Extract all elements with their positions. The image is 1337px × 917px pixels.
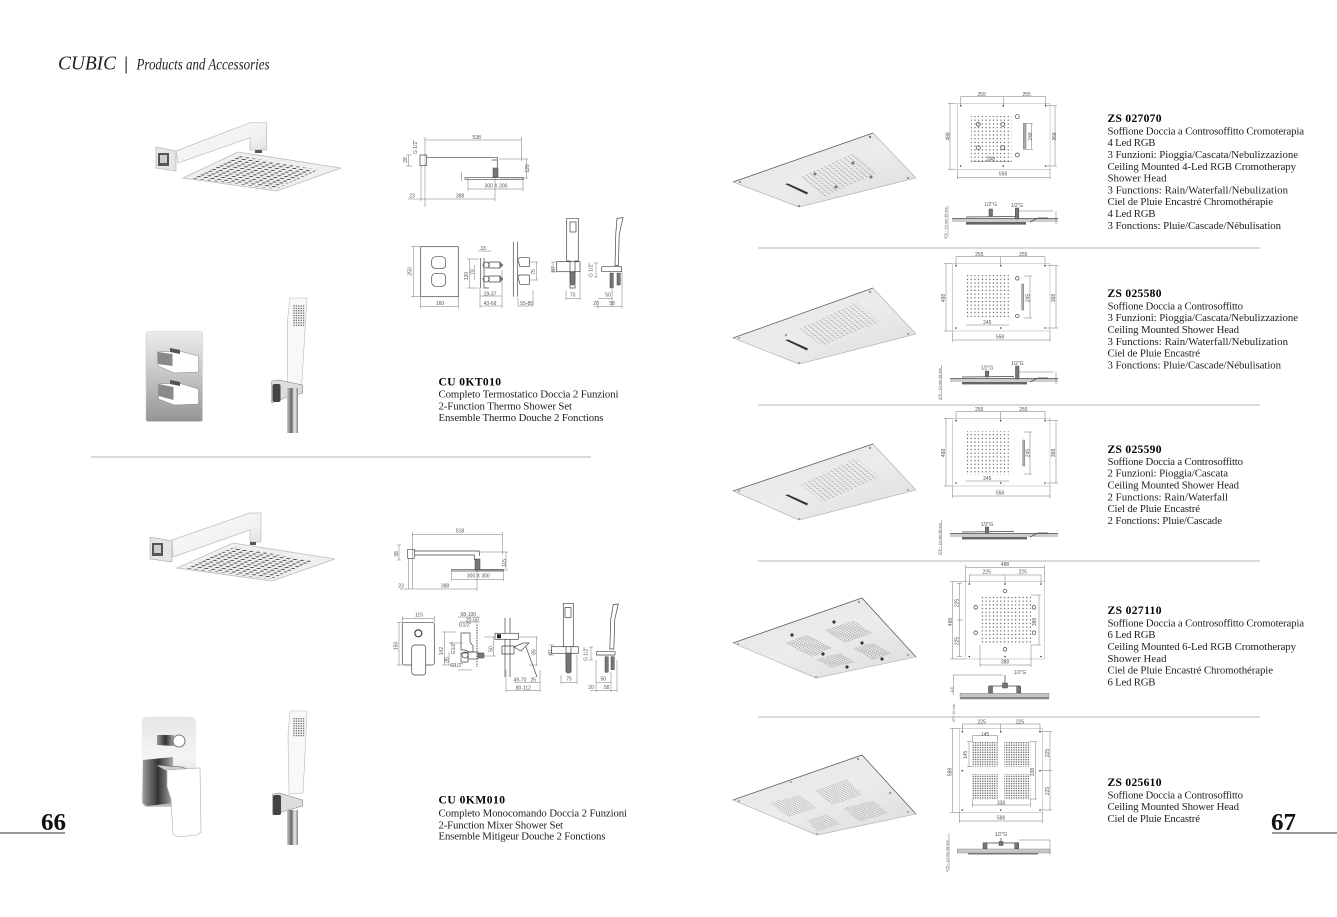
page number 66: 66 (41, 810, 66, 836)
drawing: 4-LED panel side view (944, 202, 1058, 239)
drawing: mixer valve section: 80-112 (516, 685, 531, 691)
drawing: 6-LED panel plan: 225 (983, 570, 991, 576)
text block: ZS 027110: Shower Head (1108, 653, 1167, 665)
text block: ZS 025610: Ceiling Mounted Shower Head (1108, 801, 1240, 813)
drawing: mixer valve section: 25 (531, 678, 536, 684)
drawing: four-zone panel plan: 338 (997, 800, 1005, 806)
photo: hand shower and bracket (273, 711, 307, 845)
drawing: four-zone panel plan: 588 (997, 816, 1005, 822)
photo: 3-function ceiling shower panel (733, 288, 916, 364)
panel: CU 0KT010 thermo shower set (146, 123, 341, 433)
text block: ZS 025580: 3 Functions: Rain/Waterfall/Nebulization (1108, 336, 1289, 348)
page heading: Products and Accessories (136, 56, 270, 74)
page number 67: 67 (1271, 810, 1296, 836)
drawing: 4-LED panel side view: 1/2"G (984, 202, 997, 208)
text block: ZS 027070: Soffione Doccia a Controsoffitto Cromoterapia (1108, 125, 1304, 137)
drawing: hand shower front and side: 70 (570, 293, 576, 299)
drawing: four-zone panel plan: 145 (981, 732, 989, 738)
drawing: shower arm elevation: 23 (398, 583, 404, 589)
drawing: 6-LED panel side view: 115 (950, 687, 954, 693)
drawing: hand shower front and side (551, 218, 623, 309)
drawing: 3-function panel plan: 368 (1051, 294, 1057, 302)
drawing: shower arm elevation: 518 (456, 528, 464, 534)
text block: ZS 025590: Ciel de Pluie Encastré (1108, 503, 1200, 515)
drawing: 4-LED panel plan: 558 (999, 172, 1007, 178)
drawing: hand shower front and side: 87 (548, 649, 554, 655)
text block: ZS 025590 (1108, 444, 1243, 527)
drawing: 2-function panel side view (938, 520, 1058, 555)
drawing: mixer valve section: 142 (439, 647, 445, 655)
drawing: hand shower front and side: 20 (593, 301, 599, 307)
text block: ZS 025610: ZS 025610 (1108, 777, 1162, 789)
drawing: 2-function panel side view: 475 ~ 10 mm 48 mm (938, 523, 942, 555)
text block: CU 0KT010 (438, 376, 618, 424)
diagram: CU 0KM010 technical drawings (394, 528, 618, 692)
text block: ZS 025590: 2 Fonctions: Pluie/Cascade (1108, 515, 1222, 527)
text block: ZS 027110: Ciel de Pluie Encastré Chromothérapie (1108, 665, 1273, 677)
drawing: shower arm elevation: 388 (456, 194, 464, 200)
text block: ZS 025590: 2 Functions: Rain/Waterfall (1108, 491, 1228, 503)
page number 67 (1271, 810, 1337, 836)
page heading (58, 52, 270, 74)
drawing: shower arm elevation (403, 135, 531, 207)
drawing: shower arm elevation: 28 (403, 157, 409, 163)
photo: rain shower head with wall arm (156, 123, 341, 191)
drawing: shower arm elevation: 300 X 300 (467, 573, 490, 579)
drawing: 3-function panel plan: 488 (941, 294, 947, 302)
text block: ZS 025580: 3 Funzioni: Pioggia/Cascata/Nebulizzazione (1108, 312, 1298, 324)
drawing: mixer plate front: 115 (415, 613, 423, 619)
drawing: 2-function panel plan: 368 (1051, 449, 1057, 457)
photo: rain shower head with wall arm (150, 513, 335, 581)
drawing: 3-function panel side view: 1/2"G (981, 365, 993, 371)
photo: thermostatic valve plate (146, 332, 202, 422)
drawing: hand shower front and side: 50 (605, 293, 611, 299)
text block: ZS 025590: Ceiling Mounted Shower Head (1108, 480, 1240, 492)
text block: CU 0KT010: 2-Function Thermo Shower Set (438, 400, 572, 412)
drawing: shower arm elevation: 120 (525, 164, 531, 173)
text block: ZS 025610: Ciel de Pluie Encastré (1108, 813, 1200, 825)
drawing: mixer valve section: 68-100 (461, 612, 476, 618)
drawing: 3-function panel plan: 245 (983, 320, 992, 326)
drawing: 4-LED panel plan (946, 92, 1058, 179)
text block: ZS 027110: 6 Led RGB (1108, 629, 1156, 641)
text block: ZS 025580: Ceiling Mounted Shower Head (1108, 324, 1240, 336)
drawing: thermostatic plate front (408, 247, 458, 309)
drawing: thermostatic valve section: 33 (480, 246, 486, 252)
drawing: four-zone panel plan: 225 (1045, 749, 1051, 757)
text block: ZS 025580: 3 Fonctions: Pluie/Cascade/Nébulisation (1108, 359, 1282, 371)
drawing: 6-LED panel side view: 475~10 mm (952, 704, 956, 722)
drawing: 3-function panel plan: 255 (975, 252, 984, 258)
text block: ZS 027110: Soffione Doccia a Controsoffitto Cromoterapia (1108, 617, 1304, 629)
drawing: 2-function panel plan: 558 (996, 490, 1004, 496)
drawing: hand shower front and side: 20 (588, 685, 594, 691)
text block: ZS 027070: 4 Led RGB (1108, 208, 1156, 220)
drawing: shower arm elevation: 300 X 300 (485, 184, 508, 190)
drawing: mixer valve section: G1/2" (450, 663, 463, 669)
panel: ZS 025580 (733, 252, 1298, 400)
drawing: mixer plate front: 150 (394, 642, 400, 650)
text block: ZS 027070: Ceiling Mounted 4-Led RGB Cromotherapy (1108, 161, 1297, 173)
drawing: four-zone panel plan: 225 (1016, 720, 1024, 726)
text block: ZS 025590: Soffione Doccia a Controsoffitto (1108, 456, 1243, 468)
drawing: thermostatic valve section: 120 (464, 272, 470, 280)
text block: CU 0KM010: CU 0KM010 (438, 794, 505, 806)
drawing: mixer valve section: 50 (488, 646, 494, 652)
drawing: 4-LED panel plan: 488 (946, 132, 952, 141)
drawing: 2-function panel side view: 1/2"G (981, 522, 993, 528)
drawing: 4-LED panel side view: 475 ~ 10 mm 48 mm (944, 207, 948, 239)
panel: CU 0KM010 mixer shower set (142, 513, 335, 845)
photo: 2-function ceiling shower panel (733, 444, 916, 520)
text block: ZS 027070: 3 Funzioni: Pioggia/Cascata/Nebulizzazione (1108, 149, 1298, 161)
photo: four-zone square ceiling panel (733, 755, 916, 835)
panel: ZS 025590 (733, 407, 1243, 555)
drawing: shower arm elevation: 388 (441, 583, 449, 589)
drawing: 3-function panel plan: 558 (996, 335, 1004, 341)
drawing: hand shower front and side: G 1/2" (584, 647, 590, 661)
drawing: 6-LED panel side view (950, 670, 1049, 722)
text block: ZS 027070: Ciel de Pluie Encastré Chromothérapie (1108, 196, 1273, 208)
text block: ZS 025580: ZS 025580 (1108, 288, 1162, 300)
text block: ZS 027110: Ceiling Mounted 6-Led RGB Cromotherapy (1108, 641, 1297, 653)
drawing: mixer plate front (394, 613, 434, 675)
drawing: thermostatic plate front: 160 (436, 301, 444, 307)
photo: mixer valve with lever (142, 717, 201, 837)
page number 66 (0, 810, 66, 836)
drawing: thermostatic valve section (464, 242, 538, 308)
panel: ZS 027110 (733, 562, 1304, 722)
text block: ZS 027110 (1108, 605, 1304, 688)
drawing: 4-LED panel side view: 1/2"G (1011, 203, 1023, 209)
text block: CU 0KM010 (438, 794, 627, 842)
photo: 6-LED square ceiling panel (733, 598, 916, 678)
drawing: hand shower front and side: G 1/2" (588, 263, 594, 277)
text block: ZS 027070: Shower Head (1108, 173, 1167, 185)
drawing: thermostatic valve section: 55-85 (520, 301, 533, 307)
drawing: 2-function panel plan (941, 407, 1058, 498)
drawing: hand shower front and side: 58 (609, 301, 615, 307)
text block: ZS 025610 (1108, 777, 1243, 825)
drawing: 2-function panel plan: 245 (983, 476, 992, 482)
drawing: four-zone panel side view: 475 ~ 10 mm 48 mm (946, 840, 950, 872)
drawing: hand shower front and side: 87 (551, 266, 557, 272)
drawing: thermostatic valve section: 43-69 (484, 301, 497, 307)
drawing: 6-LED panel plan: 488 (948, 618, 954, 626)
drawing: four-zone panel plan: 225 (978, 720, 986, 726)
text block: CU 0KT010: Ensemble Thermo Douche 2 Fonctions (438, 412, 604, 424)
diagram: CU 0KT010 technical drawings (403, 135, 623, 309)
drawing: shower arm elevation: 538 (473, 135, 481, 141)
drawing: four-zone panel plan: 338 (1030, 768, 1036, 776)
drawing: 3-function panel plan: 245 (1026, 294, 1032, 302)
drawing: mixer valve section: 49-70 (514, 678, 527, 684)
drawing: 3-function panel side view: 1/2"G (1011, 361, 1024, 367)
photo: 4-LED ceiling shower panel (733, 133, 916, 207)
drawing: four-zone panel plan: 145 (963, 751, 969, 759)
drawing: 4-LED panel plan: 248 (987, 156, 995, 162)
drawing: 4-LED panel plan: 248 (1028, 132, 1034, 141)
drawing: mixer valve section: 35 (444, 657, 450, 663)
text block: CU 0KM010: Completo Monocomando Doccia 2 Funzioni (438, 807, 627, 819)
drawing: hand shower front and side: 58 (604, 685, 610, 691)
page heading: CUBIC (58, 52, 117, 74)
drawing: thermostatic plate front: 250 (408, 267, 414, 276)
drawing: 6-LED panel plan: 225 (1019, 570, 1027, 576)
text block: ZS 027070 (1108, 113, 1304, 232)
drawing: mixer valve section: 20-50 (466, 618, 479, 624)
drawing: thermostatic valve section: 19-37 (484, 292, 497, 298)
drawing: thermostatic valve section: 70 (470, 269, 476, 275)
drawing: 4-LED panel plan: 255 (1023, 92, 1031, 98)
drawing: mixer valve section (439, 612, 540, 692)
drawing: hand shower front and side: 50 (601, 677, 606, 683)
photo: hand shower and bracket (272, 298, 307, 433)
drawing: shower arm elevation (394, 528, 508, 591)
drawing: 6-LED panel plan: 388 (1001, 660, 1009, 666)
drawing: 3-function panel plan (941, 252, 1058, 342)
drawing: shower arm elevation: 38 (394, 551, 400, 557)
drawing: mixer valve section: G1/2" (451, 641, 457, 654)
drawing: 6-LED panel side view: 1/2"G (1014, 670, 1026, 676)
drawing: 4-LED panel plan: 368 (1052, 132, 1058, 141)
drawing: shower arm elevation: 23 (409, 194, 415, 200)
drawing: hand shower front and side (548, 603, 618, 692)
drawing: 6-LED panel plan (948, 562, 1044, 667)
text block: ZS 027110: ZS 027110 (1108, 605, 1162, 617)
drawing: mixer valve section: 85 (532, 649, 538, 655)
text block: CU 0KM010: 2-Function Mixer Shower Set (438, 819, 563, 831)
drawing: shower arm elevation: 115 (502, 559, 508, 567)
drawing: 6-LED panel plan: 225 (954, 599, 960, 607)
drawing: four-zone panel plan: 225 (1045, 787, 1051, 795)
text block: ZS 027070: 3 Fonctions: Pluie/Cascade/Nébulisation (1108, 220, 1282, 232)
drawing: thermostatic valve section: 75 (531, 269, 537, 275)
drawing: 6-LED panel plan: 388 (1032, 618, 1038, 626)
drawing: four-zone panel plan: 588 (948, 768, 954, 776)
drawing: hand shower front and side: 75 (566, 677, 572, 683)
text block: ZS 025590: ZS 025590 (1108, 444, 1162, 456)
drawing: four-zone panel side view (946, 832, 1050, 872)
text block: ZS 025580: Soffione Doccia a Controsoffitto (1108, 300, 1243, 312)
drawing: 2-function panel plan: 245 (1026, 449, 1032, 457)
drawing: 2-function panel plan: 488 (941, 449, 947, 457)
text block: ZS 027110: 6 Led RGB (1108, 676, 1156, 688)
text block: ZS 025580 (1108, 288, 1298, 371)
text block: ZS 025610: Soffione Doccia a Controsoffitto (1108, 789, 1243, 801)
text block: ZS 027070: ZS 027070 (1108, 113, 1162, 125)
drawing: 3-function panel side view (938, 361, 1058, 400)
drawing: 4-LED panel plan: 255 (978, 92, 986, 98)
drawing: 2-function panel plan: 255 (975, 407, 984, 413)
drawing: mixer valve section: G1/2" (459, 622, 472, 628)
drawing: 3-function panel plan: 255 (1019, 252, 1028, 258)
panel: ZS 027070 (733, 92, 1304, 239)
text block: CU 0KM010: Ensemble Mitigeur Douche 2 Fonctions (438, 830, 606, 842)
text block: ZS 027070: 4 Led RGB (1108, 137, 1156, 149)
text block: CU 0KT010: CU 0KT010 (438, 376, 501, 388)
drawing: four-zone panel side view: 1/2"G (995, 832, 1007, 838)
drawing: shower arm elevation: G 1/2" (413, 140, 419, 154)
text block: ZS 025590: 2 Funzioni: Pioggia/Cascata (1108, 468, 1228, 480)
text block: ZS 027070: 3 Functions: Rain/Waterfall/Nebulization (1108, 184, 1289, 196)
text block: CU 0KT010: Completo Termostatico Doccia 2 Funzioni (438, 388, 618, 400)
drawing: 6-LED panel plan: 225 (954, 637, 960, 645)
panel: ZS 025610 (733, 720, 1243, 872)
drawing: 2-function panel plan: 255 (1019, 407, 1028, 413)
drawing: 6-LED panel plan: 488 (1001, 562, 1009, 568)
drawing: 3-function panel side view: 475 ~ 10 mm 48 mm (938, 368, 942, 400)
text block: ZS 025580: Ciel de Pluie Encastré (1108, 348, 1200, 360)
drawing: four-zone panel plan (948, 720, 1052, 823)
